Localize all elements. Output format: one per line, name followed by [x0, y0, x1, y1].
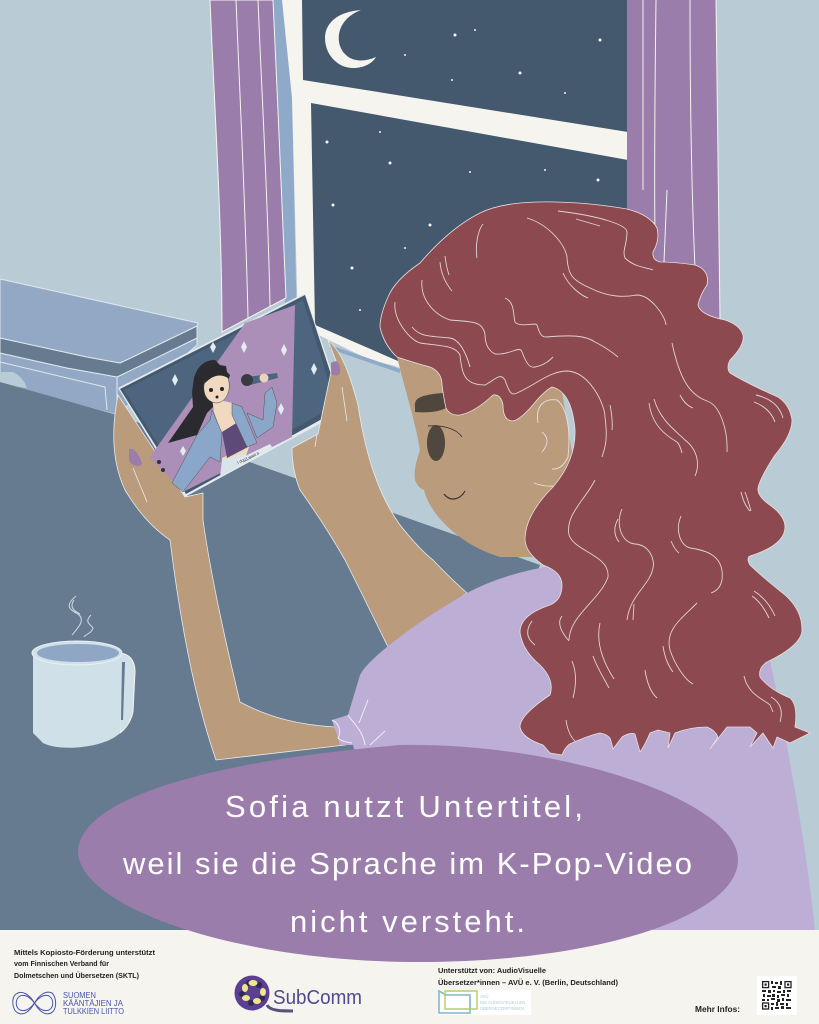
- funding note: vom Finnischen Verband für: [14, 959, 109, 968]
- more info label: Mehr Infos:: [695, 1005, 740, 1014]
- neck and chest: [212, 398, 240, 434]
- logo: SubComm: SubComm: [273, 987, 362, 1009]
- left curtain: [210, 0, 286, 332]
- caption bubble: [78, 745, 738, 962]
- supporter note: Unterstützt von: AudioVisuelle: [438, 966, 546, 975]
- box on the desk: [0, 279, 198, 415]
- funding note: Mittels Kopiosto-Förderung unterstützt: [14, 948, 156, 957]
- QR code: [757, 976, 797, 1015]
- left arm and hand: [114, 395, 352, 760]
- microphone: [247, 373, 278, 385]
- funding note: [14, 948, 156, 980]
- logo: SKTL: SUOMEN: [63, 991, 96, 1000]
- logo: SubComm: [234, 976, 362, 1011]
- eyebrow: [415, 393, 446, 412]
- top: [222, 422, 248, 458]
- tablet showing K-pop video: [118, 293, 345, 497]
- window with night sky: [273, 0, 628, 373]
- logo: AVÜ: ÜBERSETZER*INNEN: [480, 1006, 524, 1011]
- footer band: [0, 930, 819, 1024]
- logo: SKTL: TULKKIEN LIITTO: [63, 1007, 124, 1016]
- icon: crescent moon: [325, 10, 376, 68]
- hair strands: [395, 211, 783, 476]
- ear lines: [534, 400, 569, 486]
- icon: steaming mug: [32, 596, 135, 748]
- right curtain: [627, 0, 720, 320]
- hair: [380, 202, 810, 755]
- supporter note: [438, 966, 618, 987]
- purple thumbnail: [129, 449, 142, 466]
- caption text: weil sie die Sprache im K-Pop-Video: [122, 846, 692, 881]
- logo: AVÜ: [438, 990, 531, 1015]
- logo: AVÜ: DIE AUDIOVISUELLEN: [480, 1000, 525, 1005]
- shirt: [332, 566, 815, 930]
- logo: SKTL: KÄÄNTÄJIEN JA: [63, 999, 124, 1008]
- midriff and pants: [222, 444, 250, 462]
- logo: AVÜ: AVÜ: [480, 994, 489, 999]
- right arm and hand: [292, 340, 467, 647]
- caption text: nicht versteht.: [290, 904, 525, 939]
- stars: [326, 29, 602, 311]
- lower hair strands: [528, 480, 781, 742]
- face: [397, 357, 575, 557]
- mouth: [444, 491, 465, 499]
- sparkles: [172, 341, 317, 456]
- face: [204, 374, 229, 403]
- caption text: Sofia nutzt Untertitel,: [225, 789, 583, 824]
- funding note: Dolmetschen und Übersetzen (SKTL): [14, 971, 139, 980]
- singer: [168, 360, 278, 492]
- long black hair: [168, 360, 230, 443]
- subtitle: [236, 444, 272, 465]
- caption text: [122, 789, 692, 939]
- purple thumbnail: [331, 361, 340, 376]
- subtitle: I don't want it: [236, 450, 260, 465]
- jacket: [172, 410, 222, 492]
- supporter note: Übersetzer*innen – AVÜ e. V. (Berlin, Deutschland): [438, 978, 618, 987]
- eye: [427, 425, 445, 461]
- desk: [0, 382, 540, 930]
- logo: SKTL: [13, 991, 124, 1016]
